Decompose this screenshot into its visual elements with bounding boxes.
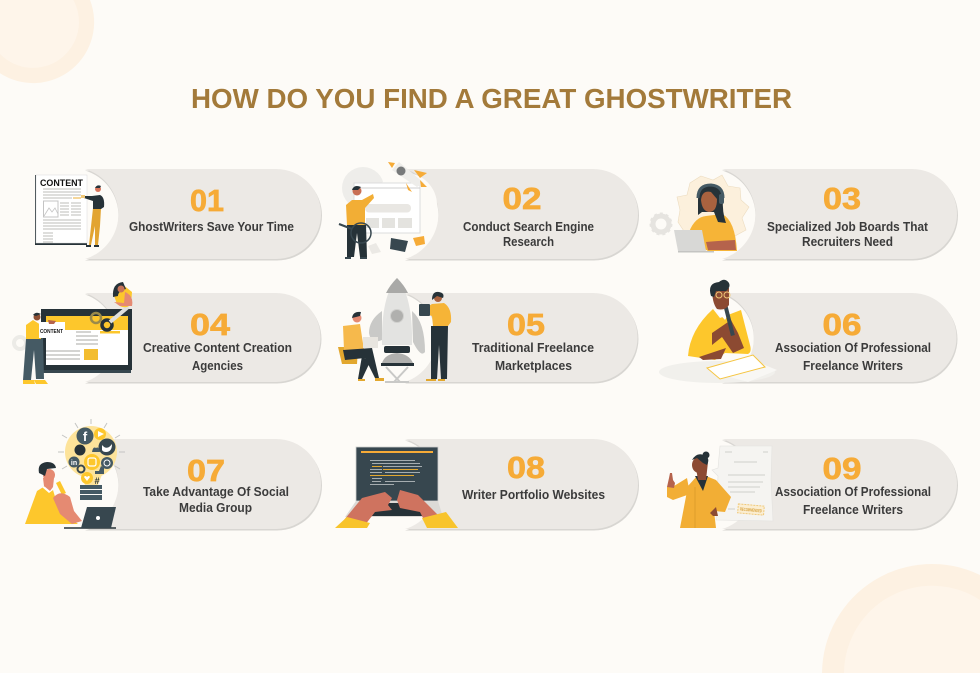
icon: content agency team at monitor: CONTENT: [40, 329, 64, 335]
icon: content page with presenter: CONTENT: [40, 178, 83, 189]
decorative circle: top left: [0, 0, 94, 83]
panel: card 04: [14, 282, 321, 384]
icon: search engine research: [339, 162, 437, 259]
label 03: Specialized Job Boards That: [767, 220, 929, 234]
label 04 line 2: Agencies: [192, 359, 243, 373]
label 02: Conduct Search Engine: [463, 220, 594, 234]
number 09: 09: [822, 451, 862, 486]
label 08: Writer Portfolio Websites: [462, 488, 605, 502]
number 03: 03: [823, 181, 861, 216]
icon: rocket with team: [338, 278, 451, 382]
icon: social media lightbulb: in: [71, 460, 77, 467]
panel: card 06: [659, 280, 957, 384]
icon: content agency team at monitor: [14, 282, 132, 384]
label 03 line 2: Recruiters Need: [802, 235, 893, 249]
label 06: Association Of Professional: [775, 341, 931, 355]
panel: card 07: [25, 419, 322, 530]
icon: woman with recommendation letter: RECOMMENDED: [740, 507, 763, 513]
panel: card 01: [35, 169, 322, 260]
number 08: 08: [507, 450, 545, 485]
label 06 line 2: Freelance Writers: [803, 359, 903, 373]
panel: card 09: [667, 439, 958, 530]
number 07: 07: [187, 453, 225, 488]
label 07 line 2: Media Group: [179, 501, 252, 515]
icon: woman with recommendation letter: [667, 446, 773, 528]
icon: thinking man at desk: [659, 280, 777, 383]
label 05 line 2: Marketplaces: [495, 359, 572, 373]
label 02 line 2: Research: [503, 235, 554, 249]
panel: card 05: [338, 278, 638, 384]
label 09 line 2: Freelance Writers: [803, 503, 903, 517]
number 04: 04: [190, 307, 231, 342]
icon: social media lightbulb: #: [94, 476, 100, 486]
icon: woman with headset and gear: [650, 175, 749, 252]
panel: card 08: [335, 439, 639, 530]
panel: card 03: [650, 169, 958, 260]
panel: card 02: [339, 162, 639, 260]
number 05: 05: [507, 307, 545, 342]
label 01: GhostWriters Save Your Time: [129, 220, 294, 234]
label 05: Traditional Freelance: [472, 341, 594, 355]
icon: content page with presenter: [35, 175, 104, 247]
number 01: 01: [190, 183, 224, 218]
number 02: 02: [502, 181, 542, 216]
label 07: Take Advantage Of Social: [143, 485, 289, 499]
number 06: 06: [822, 307, 862, 342]
label 04: Creative Content Creation: [143, 341, 292, 355]
label 09: Association Of Professional: [775, 485, 931, 499]
title: HOW DO YOU FIND A GREAT GHOSTWRITER: [191, 83, 792, 114]
icon: hands typing on laptop: [335, 447, 458, 528]
icon: social media lightbulb: [25, 419, 125, 528]
icon: social media lightbulb: f: [83, 429, 88, 444]
decorative circle: bottom right: [822, 564, 980, 673]
